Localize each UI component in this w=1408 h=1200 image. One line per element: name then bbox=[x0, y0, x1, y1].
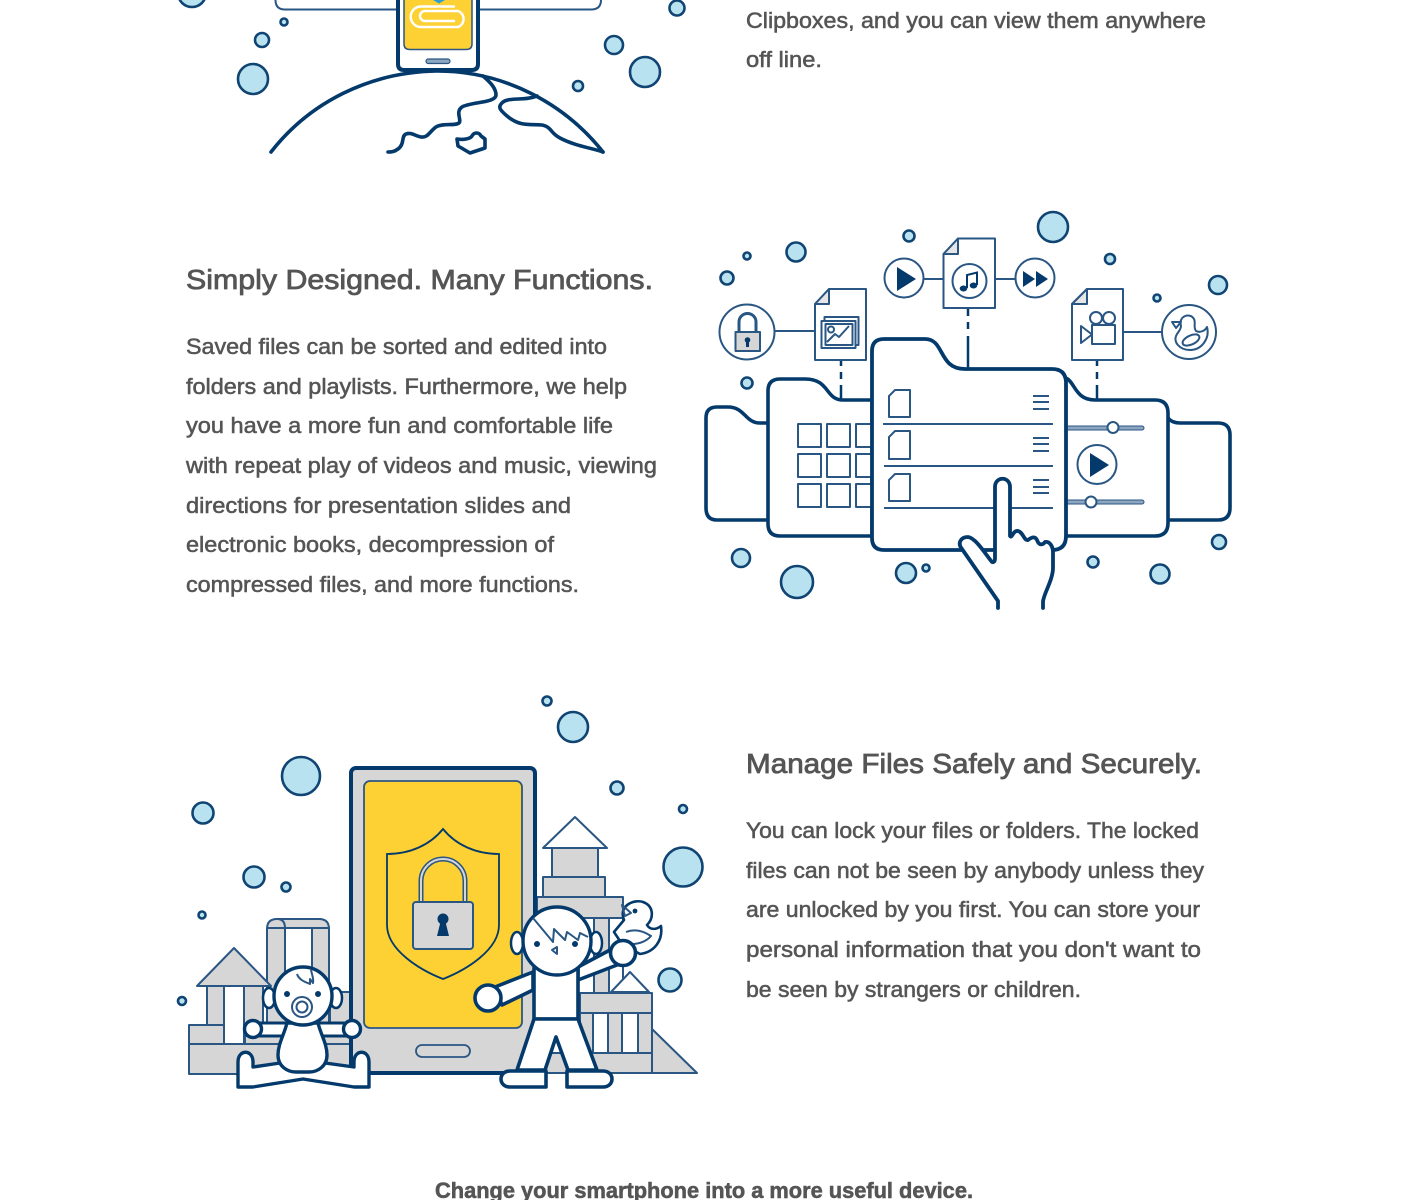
blocks: left tower bbox=[189, 919, 354, 1074]
icon: lock circle bbox=[720, 304, 774, 360]
text: manage files body: files can not be seen by anybody unless they bbox=[746, 858, 1204, 883]
text: simply designed body: compressed files, and more functions. bbox=[186, 572, 579, 597]
text: manage files body bbox=[746, 818, 1204, 1002]
boy with rubber duck bbox=[475, 901, 661, 1087]
text: simply designed body: with repeat play of videos and music, viewing bbox=[185, 453, 657, 478]
folder: far right bbox=[1168, 418, 1230, 520]
icon: duck circle bbox=[1162, 305, 1216, 359]
blocks: right tower bbox=[530, 817, 697, 1073]
heading: manage files: Manage Files Safely and Securely. bbox=[746, 748, 1202, 779]
phone body bbox=[351, 768, 535, 1073]
text: simply designed body bbox=[185, 334, 657, 597]
text: manage files body: You can lock your files or folders. The locked bbox=[746, 818, 1199, 843]
phone bbox=[398, 0, 478, 70]
folder: far left bbox=[706, 407, 768, 520]
bubbles around globe bbox=[178, 0, 684, 94]
folder: player bbox=[1062, 378, 1168, 536]
folder: grid of thumbnails bbox=[768, 379, 879, 536]
text: manage files body: personal information that you don't want to bbox=[746, 937, 1201, 962]
text: simply designed body: directions for presentation slides and bbox=[186, 493, 571, 518]
icon: video document bbox=[1072, 289, 1123, 360]
text: simply designed body: folders and playlists. Furthermore, we help bbox=[186, 374, 627, 399]
baby bbox=[238, 967, 369, 1087]
phone home button bbox=[416, 1045, 470, 1057]
icon: play circle bbox=[884, 258, 924, 298]
illustration: folders and functions bbox=[706, 212, 1230, 608]
heading: simply designed: Simply Designed. Many Functions. bbox=[186, 264, 653, 295]
text: simply designed body: you have a more fun and comfortable life bbox=[186, 413, 613, 438]
icon: music document bbox=[944, 238, 995, 308]
shield with padlock bbox=[387, 829, 499, 979]
text: simply designed body: electronic books, decompression of bbox=[186, 532, 555, 557]
globe bbox=[271, 71, 603, 153]
text: manage files body: are unlocked by you first. You can store your bbox=[746, 897, 1200, 922]
bubbles around folders bbox=[720, 212, 1227, 598]
icon: fast forward circle bbox=[1016, 258, 1054, 298]
side panels bbox=[276, 0, 601, 10]
bubbles around phone bbox=[178, 696, 702, 1005]
text: clipboxes continuation bbox=[746, 8, 1206, 72]
text: manage files body: be seen by strangers or children. bbox=[746, 977, 1081, 1002]
text: clipboxes continuation: Clipboxes, and you can view them anywhere bbox=[746, 8, 1206, 33]
illustration: phone on globe bbox=[178, 0, 684, 153]
connectors bbox=[775, 279, 1162, 400]
folder: file list bbox=[872, 339, 1066, 550]
illustration: phone security with children bbox=[178, 696, 702, 1087]
phone screen bbox=[364, 781, 522, 1028]
icon: image document bbox=[815, 289, 866, 360]
text: simply designed body: Saved files can be sorted and edited into bbox=[186, 334, 607, 359]
hand pointing bbox=[960, 479, 1053, 608]
text: clipboxes continuation: off line. bbox=[746, 47, 822, 72]
rubber duck bbox=[614, 901, 661, 954]
